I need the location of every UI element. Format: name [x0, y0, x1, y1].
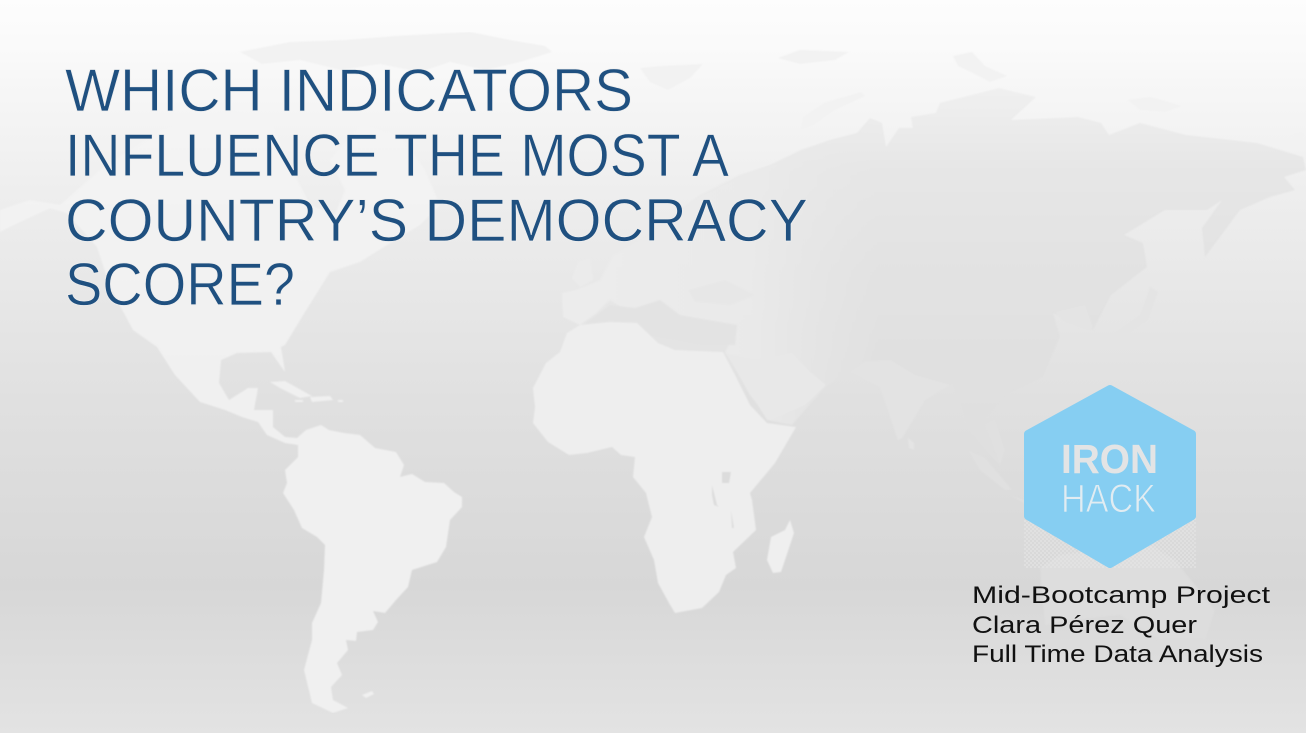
map: Japan and Korea [1055, 287, 1158, 345]
map: Caribbean islands [270, 381, 343, 402]
credit line 2: Clara Pérez Quer [972, 612, 1197, 639]
map: African lakes [712, 472, 734, 528]
logo: Ironhack [1028, 389, 1192, 564]
map: South America [283, 425, 462, 713]
map: Great Britain [572, 258, 593, 287]
logo backing pattern [1024, 518, 1196, 568]
map: Eurasia [562, 88, 1306, 465]
map: Madagascar [767, 520, 794, 573]
title line 3: COUNTRY’S DEMOCRACY [65, 187, 808, 254]
credit line 3: Full Time Data Analysis [972, 641, 1263, 668]
map: Southeast Asia islands [968, 420, 1030, 503]
project credits [972, 582, 1270, 668]
logo text: IRON: IRON [1061, 436, 1158, 482]
title [65, 57, 808, 318]
map: Australia [1040, 545, 1215, 640]
map: North America [0, 110, 440, 443]
credit line 1: Mid-Bootcamp Project [972, 582, 1270, 609]
map: arctic islands and Greenland [240, 32, 1304, 138]
map: Mediterranean and Black Sea [582, 280, 755, 345]
map: India and Sri Lanka [850, 360, 950, 440]
title line 2: INFLUENCE THE MOST A [65, 122, 729, 189]
logo hexagon [1028, 389, 1192, 564]
map: Africa and Arabia [533, 322, 796, 613]
title line 1: WHICH INDICATORS [65, 57, 633, 124]
title line 4: SCORE? [65, 251, 295, 318]
logo text: HACK: HACK [1061, 477, 1156, 521]
map: Falkland Islands [362, 691, 374, 698]
